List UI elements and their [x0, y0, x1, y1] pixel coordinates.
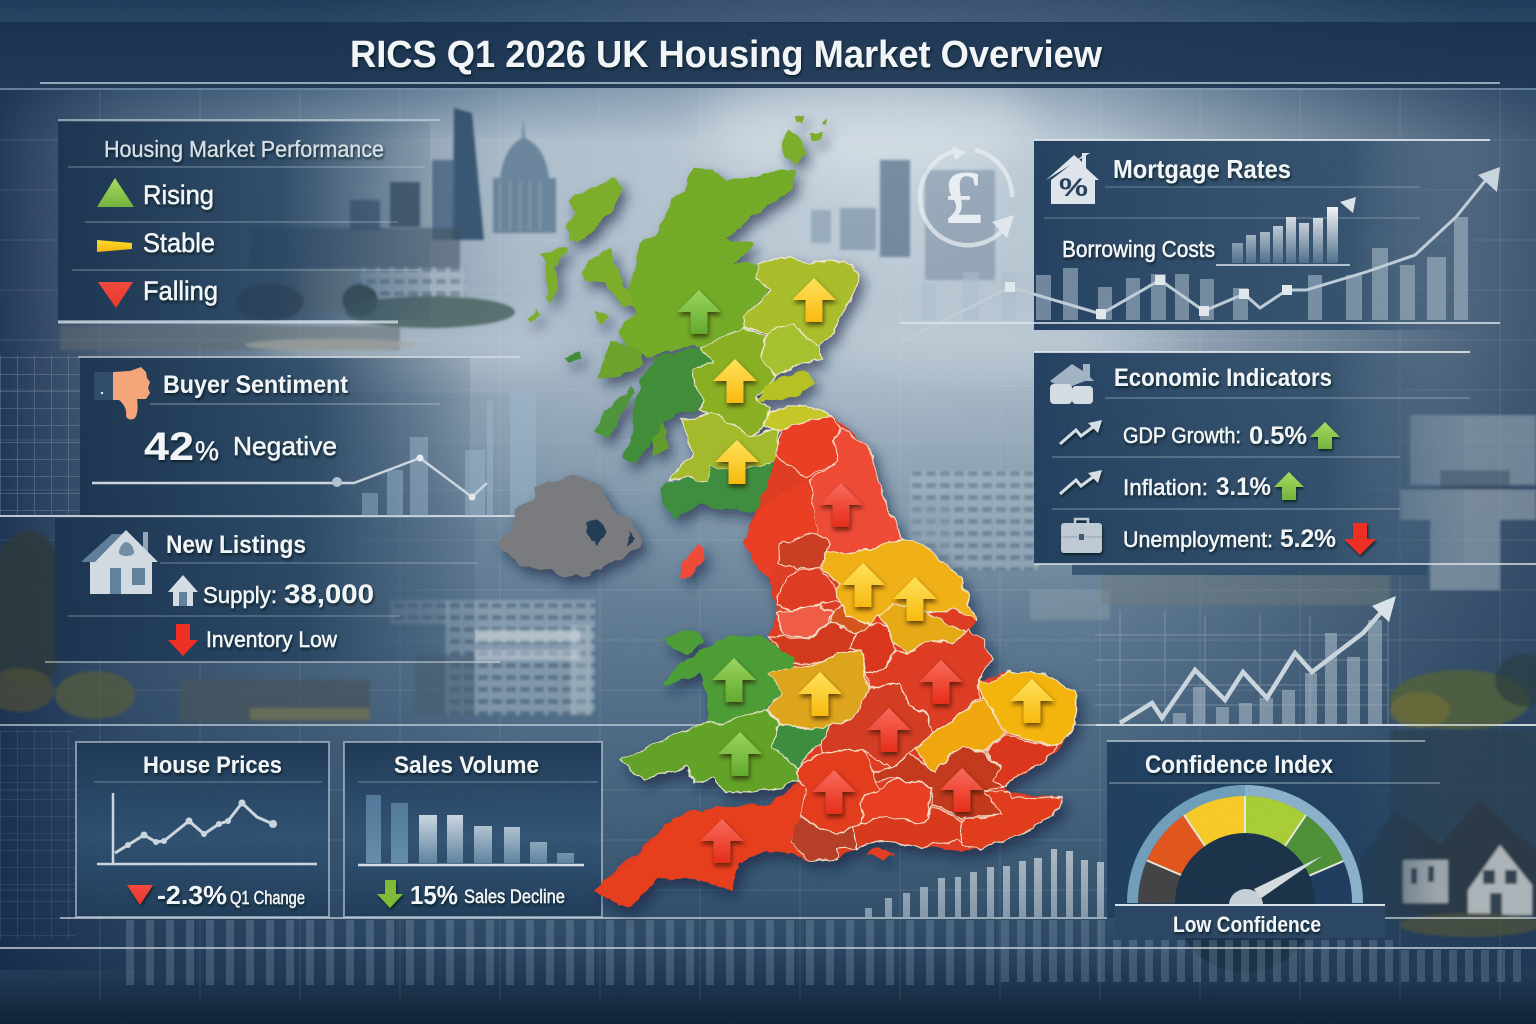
icon: house percent: % [1059, 174, 1088, 202]
legend: falling: Falling [143, 276, 218, 306]
stat: Q1 change: Q1 Change [230, 888, 305, 908]
stat: sales decline: 15% [410, 880, 458, 910]
heading: Mortgage Rates [1113, 154, 1291, 184]
row: inflation: 3.1% [1216, 473, 1271, 501]
title bar [0, 0, 1536, 88]
row: unemployment: 5.2% [1280, 525, 1336, 553]
row: GDP growth [1060, 420, 1340, 450]
bottom band [0, 918, 1536, 985]
England regions [592, 415, 1078, 908]
heading: Economic Indicators [1114, 364, 1332, 392]
arrow: Highlands rising [677, 290, 721, 334]
stat: 42% negative [144, 425, 337, 469]
cityscape: right skyline [811, 160, 1536, 730]
label plate [1115, 905, 1385, 938]
panel: buyer sentiment [0, 357, 536, 516]
Northern Ireland [497, 475, 642, 575]
panel: house prices [76, 742, 329, 917]
icon: supply arrow [168, 575, 198, 606]
stat: 42% negative: Negative [233, 431, 337, 461]
icon: thumbs down [94, 367, 150, 419]
Wales regions [620, 630, 830, 793]
gauge [1127, 785, 1363, 973]
panel: economic indicators [1034, 352, 1536, 575]
icon: house percent [1046, 153, 1099, 204]
bottom bars chart [865, 849, 1104, 917]
stat: 42% negative: % [195, 436, 219, 466]
arrow: Yorkshire [841, 563, 885, 607]
bar chart [358, 795, 584, 865]
label plate: Low Confidence [1173, 912, 1321, 937]
panel: sales volume [344, 742, 602, 917]
title: RICS Q1 2026 UK Housing Market Overview [350, 34, 1102, 76]
supply text: Supply: [203, 582, 277, 608]
mini bar chart [1216, 197, 1356, 265]
heading: Sales Volume [394, 752, 539, 779]
stat: sales decline [377, 880, 565, 910]
heading: Buyer Sentiment [163, 371, 349, 399]
mortgage chart [900, 167, 1500, 343]
arrow: South Midlands [867, 708, 911, 752]
arrow: West Midlands [798, 672, 842, 716]
row: unemployment [1061, 519, 1376, 555]
icon: pound cycle [917, 146, 1014, 245]
arrow: South Wales [718, 732, 762, 776]
legend: rising [97, 178, 214, 210]
panel: new listings [45, 518, 500, 662]
Scotland regions [620, 167, 861, 520]
row: inflation: Inflation: [1123, 475, 1208, 500]
arrow: South West [700, 819, 744, 863]
cityscape: houses lower right [1360, 730, 1536, 937]
heading: New Listings [166, 531, 306, 559]
map trend arrows [677, 278, 1054, 863]
row: GDP growth: 0.5% [1249, 422, 1307, 450]
panel: housing market performance legend [58, 120, 440, 322]
icon: house with bags [1050, 364, 1094, 404]
legend: stable [97, 228, 215, 258]
arrow: East Anglia [1010, 679, 1054, 723]
heading: Confidence Index [1145, 751, 1333, 779]
arrow: Cotswolds [812, 770, 856, 814]
stat: Q1 change [127, 880, 305, 910]
gauge needle [1229, 856, 1322, 905]
inventory text: Inventory Low [206, 627, 337, 652]
panel: confidence index [1107, 741, 1440, 973]
legend: rising: Rising [143, 180, 214, 210]
cityscape: left skyline [60, 108, 556, 351]
row: inflation [1060, 470, 1304, 501]
Scottish islands [529, 115, 829, 455]
rising chart lower right [1095, 596, 1536, 725]
panel: mortgage rates [1034, 140, 1494, 330]
icon: inventory down arrow [168, 624, 198, 656]
arrow: North East England [819, 483, 863, 527]
icon: house [81, 530, 158, 594]
supply text: 38,000 [284, 579, 374, 609]
supply text [203, 579, 374, 609]
arrow: Humber [893, 577, 937, 621]
arrow: Southern Scotland [715, 440, 759, 484]
icon: pound cycle: £ [945, 156, 983, 240]
sparkline [92, 454, 487, 500]
heading: House Prices [143, 752, 282, 779]
arrow: North Wales [712, 658, 756, 702]
stat: 42% negative: 42 [144, 425, 194, 469]
stat: sales decline: Sales Decline [464, 887, 565, 908]
legend: stable: Stable [143, 228, 215, 258]
cityscape: lower left landscape [0, 530, 595, 722]
row: GDP growth: GDP Growth: [1123, 423, 1241, 448]
subheading: Borrowing Costs [1062, 236, 1215, 262]
arrow: Central Scotland [713, 359, 757, 403]
stat: Q1 change: -2.3% [157, 880, 227, 910]
arrow: East Midlands [919, 660, 963, 704]
legend heading: Housing Market Performance [104, 136, 384, 162]
map: UK regions [497, 115, 1078, 908]
arrow: Aberdeenshire [792, 278, 836, 322]
row: unemployment: Unemployment: [1123, 527, 1273, 552]
line chart [97, 793, 317, 864]
arrow: London area [940, 768, 984, 812]
legend: falling [98, 276, 218, 308]
